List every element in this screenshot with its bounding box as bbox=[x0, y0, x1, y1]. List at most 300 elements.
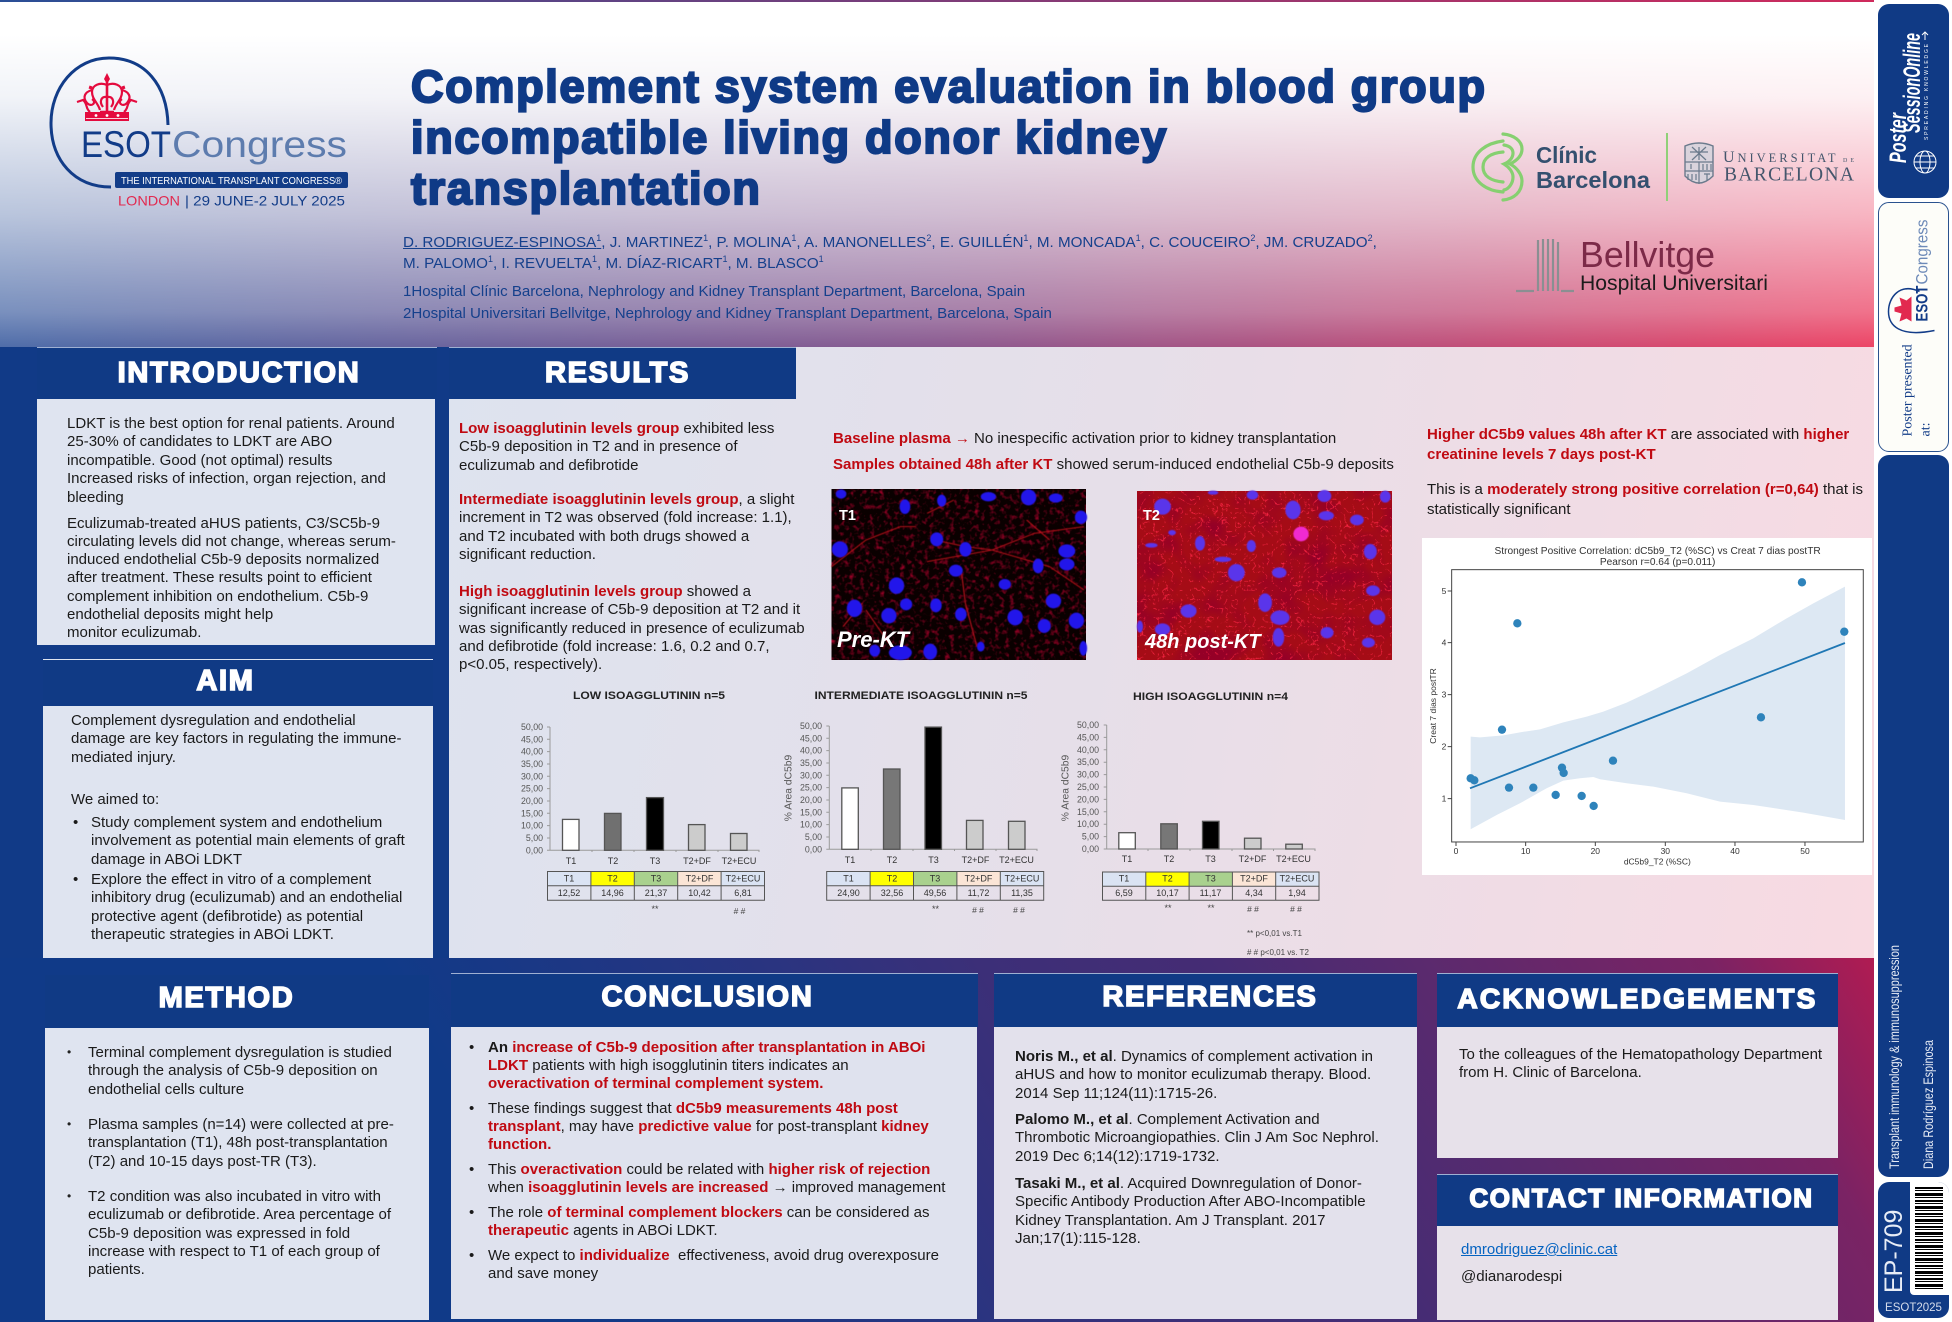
text: eculizumab: monitor eculizumab. bbox=[67, 624, 201, 641]
chart: low isoagglutinin: T2+ECU bbox=[722, 856, 756, 866]
chart: correlation scatter plot: Creat 7 dias postTR bbox=[1428, 668, 1438, 744]
data table: high: 6,59 bbox=[1115, 888, 1133, 898]
chart: high isoagglutinin: 30,00 bbox=[1077, 770, 1099, 780]
text: intermediate isoagglutinin: significant reduction. bbox=[459, 546, 596, 563]
heading: introduction bbox=[37, 347, 437, 399]
chart: high isoagglutinin: 35,00 bbox=[1077, 757, 1099, 767]
conclusion body bbox=[451, 1027, 977, 1319]
introduction body bbox=[37, 399, 435, 645]
chart: high isoagglutinin: T3 bbox=[1205, 854, 1216, 864]
text: high isoagglutinin: significant increase of C5b-9 deposition at T2 and it bbox=[459, 601, 800, 618]
text: acknowledgements: To the colleagues of the Hematopathology Department bbox=[1459, 1046, 1822, 1063]
authors: M. PALOMO1, I. REVUELTA1, M. DÍAZ-RICART1, M. BLASCO1 bbox=[403, 254, 824, 272]
aim body bbox=[43, 706, 433, 958]
reference 1: Noris M., et al. Dynamics of complement activation in bbox=[1015, 1048, 1373, 1065]
left blue band bbox=[0, 347, 449, 977]
reference 1: 2014 Sep 11;124(11):1715-26. bbox=[1015, 1085, 1217, 1102]
method bullets: • bbox=[67, 1189, 71, 1203]
data table: intermediate: 24,90 bbox=[837, 888, 860, 898]
text: method step 1: Terminal complement dysregulation is studied bbox=[88, 1044, 392, 1061]
affiliations: 1Hospital Clínic Barcelona, Nephrology and Kidney Transplant Department, Barcelona, Spain bbox=[403, 283, 1025, 300]
chart: correlation scatter plot: 20 bbox=[1591, 846, 1600, 856]
chart: high isoagglutinin: 10,00 bbox=[1077, 819, 1099, 829]
sidebar tab: topic and author: Diana Rodríguez Espinosa bbox=[1921, 1040, 1936, 1169]
chart: correlation scatter plot: 2 bbox=[1442, 742, 1447, 752]
data table: low: 10,42 bbox=[688, 888, 711, 898]
chart: intermediate isoagglutinin: 5,00 bbox=[805, 832, 822, 842]
logo: Bellvitge Hospital Universitari bbox=[1516, 234, 1768, 295]
sidebar tab: poster presented at ESOT Congress: at: bbox=[1918, 422, 1934, 436]
sidebar tab: poster presented at ESOT Congress bbox=[1878, 202, 1949, 452]
panel: method bbox=[45, 982, 429, 1320]
chart: low isoagglutinin: 30,00 bbox=[521, 771, 543, 781]
chart: high isoagglutinin: ** bbox=[1164, 903, 1172, 913]
text: intermediate isoagglutinin: Intermediate isoagglutinin levels group, a slight bbox=[459, 491, 794, 508]
data table: high: T2+ECU bbox=[1280, 874, 1314, 884]
chart: intermediate isoagglutinin: T2 bbox=[887, 855, 897, 865]
data table: intermediate bbox=[827, 872, 1044, 900]
chart: high isoagglutinin: 40,00 bbox=[1077, 745, 1099, 755]
chart: high isoagglutinin: # # bbox=[1247, 904, 1259, 914]
text: method step 3: C5b-9 deposition was expressed in fold bbox=[88, 1225, 350, 1242]
heading: aim bbox=[43, 659, 433, 706]
chart: low isoagglutinin: 15,00 bbox=[521, 808, 543, 818]
bullet list: conclusions: and save money bbox=[488, 1264, 598, 1282]
text: eculizumab: Eculizumab-treated aHUS patients, C3/SC5b-9 bbox=[67, 514, 380, 532]
text: eculizumab: after treatment. These results point to efficient bbox=[67, 569, 372, 586]
bullet list: conclusions: when isoagglutinin levels are increased → improved management bbox=[488, 1178, 945, 1196]
bullet list: conclusions: overactivation of terminal complement system. bbox=[488, 1074, 823, 1092]
data table: high: 10,17 bbox=[1156, 888, 1179, 898]
chart: low isoagglutinin: 5,00 bbox=[526, 833, 543, 843]
text: high isoagglutinin: High isoagglutinin levels group showed a bbox=[459, 583, 751, 600]
chart: intermediate isoagglutinin: # # bbox=[1013, 905, 1025, 915]
text: method step 2: Plasma samples (n=14) were collected at pre- bbox=[88, 1116, 394, 1133]
text: intermediate isoagglutinin bbox=[459, 491, 794, 563]
bullet list: conclusions: These findings suggest that dC5b9 measurements 48h post bbox=[488, 1100, 898, 1116]
logo: ESOT Congress bbox=[50, 56, 348, 208]
title: transplantation bbox=[411, 162, 762, 214]
text: method step 2: (T2) and 10-15 days post-TR (T3). bbox=[88, 1153, 317, 1170]
bullet list: conclusions: We expect to individualize effectiveness, avoid drug overexposure bbox=[488, 1246, 939, 1264]
chart: intermediate isoagglutinin: 20,00 bbox=[800, 795, 822, 805]
chart: intermediate isoagglutinin: 45,00 bbox=[800, 733, 822, 743]
reference 3: Tasaki M., et al. Acquired Downregulation of Donor- bbox=[1015, 1175, 1362, 1192]
image: 48h post-KT immunofluorescence bbox=[1137, 490, 1392, 660]
text: eculizumab: complement inhibition on endothelium. C5b-9 bbox=[67, 588, 368, 605]
text: method step 1: through the analysis of C5b-9 deposition on bbox=[88, 1062, 378, 1079]
chart: low isoagglutinin: 45,00 bbox=[521, 734, 543, 744]
heading: contact information bbox=[1437, 1174, 1838, 1226]
bullet list: conclusions: • bbox=[469, 1246, 474, 1264]
chart: low isoagglutinin: # # bbox=[734, 906, 746, 916]
data table: low: T2 bbox=[607, 874, 618, 884]
chart: correlation scatter plot: 4 bbox=[1442, 638, 1447, 648]
chart: intermediate isoagglutinin: # # bbox=[972, 905, 984, 915]
chart: intermediate isoagglutinin: T1 bbox=[845, 855, 855, 865]
chart: intermediate isoagglutinin: 0,00 bbox=[805, 844, 822, 854]
bullet list: conclusions: The role of terminal complement blockers can be considered as bbox=[488, 1204, 930, 1220]
text: method step 1: endothelial cells culture bbox=[88, 1081, 244, 1098]
chart: high isoagglutinin: 50,00 bbox=[1077, 720, 1099, 730]
sidebar tab: poster presented at ESOT Congress: Poster presented bbox=[1900, 344, 1916, 436]
chart: high isoagglutinin: ** bbox=[1207, 903, 1215, 913]
chart: low isoagglutinin: 20,00 bbox=[521, 796, 543, 806]
text: acknowledgements: from H. Clinic of Barcelona. bbox=[1459, 1064, 1642, 1081]
chart: high isoagglutinin: 0,00 bbox=[1082, 844, 1099, 854]
text: correlation finding: creatinine levels 7 days post-KT bbox=[1427, 446, 1656, 463]
references body bbox=[994, 1027, 1417, 1319]
acknowledgements body bbox=[1437, 1027, 1838, 1158]
logo: Clinic Barcelona and Universitat de Barcelona: Clínic bbox=[1536, 142, 1597, 168]
authors bbox=[403, 232, 1377, 272]
text: eculizumab bbox=[67, 514, 396, 641]
panel: aim bbox=[43, 659, 433, 958]
text: correlation finding bbox=[1427, 426, 1849, 463]
bullet list: aims: involvement as potential main elements of graft bbox=[91, 832, 405, 849]
text: introduction bbox=[67, 414, 395, 506]
text: high isoagglutinin bbox=[459, 583, 805, 673]
data table: intermediate: 49,56 bbox=[924, 888, 946, 898]
chart: high isoagglutinin: T2+DF bbox=[1239, 854, 1267, 864]
chart: high isoagglutinin: T2+ECU bbox=[1276, 854, 1311, 864]
image: 48h post-KT immunofluorescence: T2 bbox=[1143, 508, 1160, 524]
icon: Clinic symbol bbox=[1473, 134, 1522, 200]
bullet list: conclusions: • bbox=[469, 1204, 474, 1220]
chart: correlation scatter plot: 5 bbox=[1442, 586, 1447, 596]
text: intermediate isoagglutinin: increment in T2 was observed (fold increase: 1.1), bbox=[459, 509, 792, 526]
heading: acknowledgements bbox=[1437, 973, 1838, 1027]
sidebar tab: topic and author bbox=[1878, 455, 1949, 1177]
data table: intermediate: 11,72 bbox=[968, 888, 989, 898]
method body bbox=[45, 1028, 429, 1320]
chart: low isoagglutinin: T1 bbox=[566, 856, 576, 866]
data table: intermediate: 32,56 bbox=[881, 888, 903, 898]
data table: low: T2+ECU bbox=[726, 874, 760, 884]
bullet list: aims: damage in ABOi LDKT bbox=[91, 851, 242, 868]
chart: high isoagglutinin: T1 bbox=[1122, 854, 1132, 864]
heading: results bbox=[449, 347, 796, 399]
title: Complement system evaluation in blood group bbox=[411, 60, 1487, 112]
chart: high isoagglutinin: 25,00 bbox=[1077, 782, 1099, 792]
panel: introduction bbox=[37, 347, 437, 645]
chart: correlation scatter plot: Pearson r=0.64 (p=0.011) bbox=[1600, 557, 1715, 568]
chart: correlation scatter plot: 40 bbox=[1730, 846, 1740, 856]
text: method step 3: increase with respect to T1 of each group of bbox=[88, 1243, 380, 1260]
icon: globe bbox=[1914, 151, 1936, 173]
text: handle: @dianarodespi bbox=[1461, 1268, 1562, 1285]
data table: low: T3 bbox=[651, 874, 661, 884]
text: we aimed to: We aimed to: bbox=[71, 791, 159, 808]
bullet list: conclusions: An increase of C5b-9 deposition after transplantation in ABOi bbox=[488, 1038, 925, 1056]
data table: high: T1 bbox=[1119, 874, 1129, 884]
text: high isoagglutinin: p<0.05, respectively). bbox=[459, 656, 602, 673]
text: acknowledgements bbox=[1459, 1046, 1822, 1081]
image: pre-KT immunofluorescence: T1 bbox=[839, 508, 856, 524]
sidebar tab: Poster Session Online bbox=[1878, 4, 1949, 198]
data table: high: 4,34 bbox=[1245, 888, 1263, 898]
chart: intermediate isoagglutinin: 10,00 bbox=[800, 820, 822, 830]
chart: high isoagglutinin: 5,00 bbox=[1082, 832, 1099, 842]
chart: low isoagglutinin: 40,00 bbox=[521, 747, 543, 757]
title bbox=[410, 60, 1487, 215]
panel: contact information bbox=[1437, 1174, 1838, 1320]
reference 1: aHUS and how to monitor eculizumab therapy. Blood. bbox=[1015, 1066, 1371, 1083]
text: email: dmrodriguez@clinic.cat bbox=[1461, 1241, 1617, 1258]
image: 48h post-KT immunofluorescence: 48h post-KT bbox=[1144, 631, 1262, 653]
text: correlation strength: This is a moderately strong positive correlation (r=0,64) that is bbox=[1427, 481, 1863, 498]
sidebar tab: poster number and barcode bbox=[1878, 1182, 1949, 1318]
sidebar tab: topic and author: Transplant immunology & immunosuppression bbox=[1887, 945, 1902, 1169]
heading: references bbox=[994, 973, 1417, 1027]
panel: references bbox=[994, 973, 1417, 1319]
text: correlation finding: Higher dC5b9 values 48h after KT are associated with higher bbox=[1427, 426, 1849, 443]
logo: Bellvitge Hospital Universitari: Bellvitge bbox=[1580, 234, 1715, 275]
chart: low isoagglutinin: 35,00 bbox=[521, 759, 543, 769]
bullet list: aims: • bbox=[73, 871, 78, 888]
reference 2: Palomo M., et al. Complement Activation and bbox=[1015, 1111, 1320, 1128]
affiliations: 2Hospital Universitari Bellvitge, Nephrology and Kidney Transplant Department, Barcelona, Spain bbox=[403, 305, 1052, 322]
text: aim intro bbox=[71, 712, 402, 766]
heading: method: METHOD bbox=[159, 982, 294, 1014]
chart: low isoagglutinin: T2 bbox=[608, 856, 618, 866]
text: low isoagglutinin: eculizumab and defibrotide bbox=[459, 457, 638, 474]
logo: Clinic Barcelona and Universitat de Barcelona bbox=[1471, 132, 1854, 202]
chart: correlation scatter plot: Strongest Positive Correlation: dC5b9_T2 (%SC) vs Creat 7 dias postTR bbox=[1495, 546, 1821, 557]
heading: results: RESULTS bbox=[545, 357, 690, 389]
chart: intermediate isoagglutinin: T3 bbox=[928, 855, 939, 865]
header background bbox=[0, 0, 1874, 347]
panel: acknowledgements bbox=[1437, 973, 1838, 1158]
reference 3: Jan;17(1):115-128. bbox=[1015, 1230, 1141, 1247]
poster number: EP-709 bbox=[1880, 1210, 1908, 1293]
data table: low bbox=[548, 872, 764, 900]
heading: references: REFERENCES bbox=[1102, 981, 1318, 1013]
authors: D. RODRIGUEZ-ESPINOSA1, J. MARTINEZ1, P. MOLINA1, A. MANONELLES2, E. GUILLÉN1, M. MONCADA1, C. COUCEIRO2, JM. CRUZADO2, bbox=[403, 232, 1377, 250]
text: eculizumab: circulating levels did not change, whereas serum- bbox=[67, 533, 396, 550]
text: high isoagglutinin: was significantly reduced in presence of eculizumab bbox=[459, 620, 805, 637]
affiliations bbox=[403, 283, 1052, 322]
contact body bbox=[1437, 1226, 1838, 1320]
data table: intermediate: T1 bbox=[843, 874, 854, 884]
text: low isoagglutinin: C5b-9 deposition in T2 and in presence of bbox=[459, 438, 738, 455]
data table: intermediate: T3 bbox=[930, 874, 940, 884]
chart: low isoagglutinin: T3 bbox=[650, 856, 660, 866]
chart: high isoagglutinin: % Area dC5b9 bbox=[1060, 755, 1072, 821]
reference 3: Kidney Transplantation. Am J Transplant. 2017 bbox=[1015, 1212, 1326, 1229]
text: low isoagglutinin: Low isoagglutinin levels group exhibited less bbox=[459, 420, 774, 437]
heading: method bbox=[45, 975, 429, 1028]
chart: intermediate isoagglutinin: 40,00 bbox=[800, 746, 822, 756]
chart: low isoagglutinin: ** bbox=[651, 904, 659, 914]
chart title: intermediate: INTERMEDIATE ISOAGGLUTININ n=5 bbox=[814, 690, 1028, 702]
text: introduction: bleeding bbox=[67, 489, 124, 506]
reference 1 bbox=[1015, 1048, 1373, 1102]
text: method step 1 bbox=[88, 1044, 392, 1098]
reference 3 bbox=[1015, 1175, 1366, 1247]
bottom band background bbox=[0, 958, 1874, 1322]
heading: contact information: CONTACT INFORMATION bbox=[1469, 1183, 1814, 1213]
icon: university shield bbox=[1685, 143, 1713, 184]
chart title: low: LOW ISOAGGLUTININ n=5 bbox=[573, 690, 725, 702]
bullet list: conclusions: transplant, may have predictive value for post-transplant kidney bbox=[488, 1118, 929, 1134]
chart: high isoagglutinin: 45,00 bbox=[1077, 732, 1099, 742]
data table: high: 11,17 bbox=[1200, 888, 1221, 898]
sidebar tab: Poster Session Online: Poster bbox=[1885, 112, 1912, 163]
panel: conclusion bbox=[451, 973, 978, 1319]
logo: Bellvitge Hospital Universitari: Hospital Universitari bbox=[1580, 271, 1768, 295]
text: method step 3: T2 condition was also incubated in vitro with bbox=[88, 1188, 381, 1205]
chart: high isoagglutinin: T2 bbox=[1164, 854, 1174, 864]
bullet list: conclusions: • bbox=[469, 1160, 474, 1178]
bullet list: conclusions: therapeutic agents in ABOi LDKT. bbox=[488, 1222, 718, 1238]
text: baseline plasma: Baseline plasma → No inespecific activation prior to kidney transplantation bbox=[833, 430, 1336, 447]
method bullets bbox=[67, 1045, 71, 1203]
sidebar tab: poster presented at ESOT Congress: ESOT bbox=[1912, 285, 1932, 322]
significance legend: # # p<0,01 vs. T2 bbox=[1247, 948, 1309, 957]
bullet list: aims bbox=[73, 814, 405, 943]
text: method step 2 bbox=[88, 1116, 394, 1170]
chart: intermediate isoagglutinin: T2+ECU bbox=[999, 855, 1034, 865]
method bullets: • bbox=[67, 1045, 71, 1059]
bullet list: aims: protective agent (defibrotide) as potential bbox=[91, 908, 363, 925]
chart: correlation scatter plot: 10 bbox=[1521, 846, 1531, 856]
chart: high isoagglutinin: 15,00 bbox=[1077, 807, 1099, 817]
chart: high isoagglutinin: 20,00 bbox=[1077, 794, 1099, 804]
data table: high: T2 bbox=[1162, 874, 1173, 884]
text: method step 3 bbox=[88, 1188, 392, 1278]
significance legend: ** p<0,01 vs.T1 bbox=[1247, 929, 1302, 938]
reference 2: 2019 Dec 6;14(12):1719-1732. bbox=[1015, 1148, 1220, 1165]
chart: low isoagglutinin: 25,00 bbox=[521, 784, 543, 794]
heading: introduction: INTRODUCTION bbox=[118, 357, 360, 389]
data table: low: T1 bbox=[564, 874, 574, 884]
text: method step 2: transplantation (T1), 48h post-transplantation bbox=[88, 1134, 388, 1151]
bullet list: conclusions: This overactivation could be related with higher risk of rejection bbox=[488, 1160, 930, 1178]
bullet list: conclusions: • bbox=[469, 1100, 474, 1116]
logo: ESOT Congress: THE INTERNATIONAL TRANSPLANT CONGRESS® bbox=[121, 176, 343, 187]
chart: intermediate isoagglutinin: 15,00 bbox=[800, 807, 822, 817]
data table: low: T2+DF bbox=[686, 874, 714, 884]
bullet list: aims: • bbox=[73, 814, 78, 831]
text: intermediate isoagglutinin: and T2 incubated with both drugs showed a bbox=[459, 528, 749, 545]
data table: intermediate: T2+ECU bbox=[1005, 874, 1039, 884]
chart: intermediate isoagglutinin bbox=[784, 690, 1044, 915]
chart: intermediate isoagglutinin: 50,00 bbox=[800, 721, 822, 731]
reference 2: Thrombotic Microangiopathies. Clin J Am Soc Nephrol. bbox=[1015, 1129, 1379, 1146]
chart: intermediate isoagglutinin: 25,00 bbox=[800, 783, 822, 793]
logo: ESOT Congress: ESOT bbox=[81, 124, 171, 165]
bullet list: conclusions bbox=[469, 1038, 946, 1282]
text: eculizumab: induced endothelial C5b-9 deposits normalized bbox=[67, 551, 379, 568]
data table: high: T2+DF bbox=[1240, 874, 1268, 884]
bullet list: aims: Explore the effect in vitro of a complement bbox=[91, 871, 371, 888]
text: aim intro: Complement dysregulation and endothelial bbox=[71, 712, 356, 729]
data table: low: 14,96 bbox=[601, 888, 624, 898]
logo: Clinic Barcelona and Universitat de Barcelona: BARCELONA bbox=[1724, 164, 1854, 186]
chart: correlation scatter plot: 3 bbox=[1442, 690, 1447, 700]
data table: intermediate: T2+DF bbox=[965, 874, 993, 884]
heading: aim: AIM bbox=[196, 665, 255, 697]
icon: crown bbox=[77, 73, 137, 121]
logo: ESOT Congress: | 29 JUNE-2 JULY 2025 bbox=[185, 192, 345, 208]
chart: intermediate isoagglutinin: 30,00 bbox=[800, 770, 822, 780]
bullet list: conclusions: • bbox=[469, 1038, 474, 1056]
chart: high isoagglutinin: # # bbox=[1290, 904, 1302, 914]
icon: small crown bbox=[1894, 296, 1912, 322]
data table: high: 1,94 bbox=[1288, 888, 1306, 898]
text: introduction: Increased risks of infection, organ rejection, and bbox=[67, 470, 386, 487]
logo: ESOT Congress: Congress bbox=[172, 124, 347, 165]
chart: correlation scatter plot: 0 bbox=[1454, 846, 1459, 856]
text: correlation strength bbox=[1427, 481, 1863, 518]
panel: results bbox=[449, 347, 1874, 958]
text: samples 48h: Samples obtained 48h after KT showed serum-induced endothelial C5b-9 deposits bbox=[833, 456, 1394, 473]
chart title: high: HIGH ISOAGGLUTININ n=4 bbox=[1133, 691, 1289, 703]
sidebar tab: Poster Session Online: SPREADING KNOWLEDGE bbox=[1924, 43, 1930, 140]
data table: low: 6,81 bbox=[734, 888, 752, 898]
chart: high isoagglutinin bbox=[1060, 691, 1319, 957]
image: pre-KT immunofluorescence: Pre-KT bbox=[837, 627, 911, 652]
chart: intermediate isoagglutinin: % Area dC5b9 bbox=[784, 755, 794, 821]
chart: low isoagglutinin bbox=[521, 690, 764, 916]
text: low isoagglutinin bbox=[459, 420, 774, 474]
chart: correlation scatter plot: 30 bbox=[1661, 846, 1670, 856]
significance legend bbox=[1247, 929, 1309, 957]
bullet list: aims: Study complement system and endothelium bbox=[91, 814, 382, 831]
heading: acknowledgements: ACKNOWLEDGEMENTS bbox=[1457, 983, 1818, 1014]
text: introduction: LDKT is the best option for renal patients. Around bbox=[67, 414, 395, 432]
image: pre-KT immunofluorescence bbox=[831, 489, 1087, 660]
reference 2 bbox=[1015, 1111, 1379, 1165]
text: aim intro: damage are key factors in regulating the immune- bbox=[71, 730, 402, 747]
text: introduction: 25-30% of candidates to LDKT are ABO bbox=[67, 433, 332, 450]
text: method step 3: patients. bbox=[88, 1261, 145, 1278]
title: incompatible living donor kidney bbox=[411, 112, 1168, 162]
chart: low isoagglutinin: 0,00 bbox=[526, 845, 543, 855]
chart: low isoagglutinin: T2+DF bbox=[683, 856, 711, 866]
chart: correlation scatter plot: 1 bbox=[1442, 794, 1447, 804]
chart: correlation scatter plot: 50 bbox=[1800, 846, 1810, 856]
top edge line bbox=[0, 0, 1874, 2]
bullet list: aims: therapeutic strategies in ABOi LDKT. bbox=[91, 926, 334, 943]
bullet list: conclusions: function. bbox=[488, 1136, 551, 1152]
heading: conclusion bbox=[451, 973, 978, 1027]
text: aim intro: mediated injury. bbox=[71, 749, 176, 766]
confidence band bbox=[1471, 587, 1845, 829]
data table: low: 21,37 bbox=[645, 888, 667, 898]
logo: ESOT Congress: LONDON bbox=[118, 192, 180, 208]
bullet list: aims: inhibitory drug (eculizumab) and an endothelial bbox=[91, 889, 402, 906]
text: eculizumab: endothelial deposits might help bbox=[67, 606, 273, 623]
sidebar tab: poster presented at ESOT Congress: Congress bbox=[1912, 220, 1932, 284]
chart: correlation scatter plot: dC5b9_T2 (%SC) bbox=[1624, 857, 1691, 867]
chart: intermediate isoagglutinin: T2+DF bbox=[962, 855, 990, 865]
text: method step 3: eculizumab or defibrotide. Area percentage of bbox=[88, 1206, 391, 1223]
session code: ESOT2025 bbox=[1885, 1302, 1942, 1314]
logo: Clinic Barcelona and Universitat de Barcelona: UNIVERSITAT DE bbox=[1723, 149, 1854, 166]
logo: Clinic Barcelona and Universitat de Barcelona: Barcelona bbox=[1536, 167, 1650, 193]
data table: low: 12,52 bbox=[558, 888, 580, 898]
data table: high bbox=[1102, 872, 1319, 900]
chart: low isoagglutinin: 50,00 bbox=[521, 722, 543, 732]
chart: low isoagglutinin: 10,00 bbox=[521, 821, 543, 831]
text: high isoagglutinin: and defibrotide (fold increase: 1.6, 0.2 and 0.7, bbox=[459, 638, 770, 655]
data table: intermediate: 11,35 bbox=[1011, 888, 1033, 898]
text: introduction: incompatible. Good (not optimal) results bbox=[67, 452, 332, 469]
chart: intermediate isoagglutinin: ** bbox=[932, 904, 939, 914]
reference 3: Specific Antibody Production After ABO-Incompatible bbox=[1015, 1193, 1366, 1210]
